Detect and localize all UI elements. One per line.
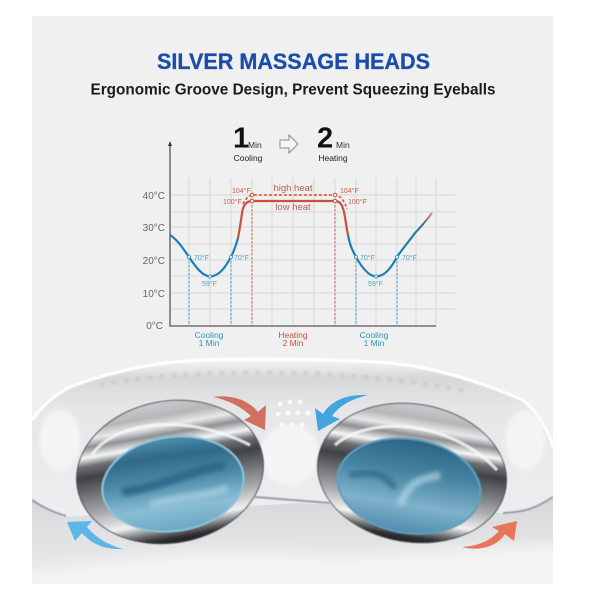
red temperature labels: 104°F: [232, 187, 251, 195]
right massage head: [316, 402, 508, 544]
phase labels: [195, 330, 389, 348]
right blue lens: [336, 436, 482, 536]
step: 1 min cooling: Min: [248, 140, 262, 150]
phase labels: Cooling: [360, 330, 389, 340]
step: 2 min heating: [317, 122, 350, 163]
high heat dashed line: [243, 195, 347, 209]
blue temperature labels: 59°F: [368, 280, 383, 288]
step: 2 min heating: 2: [317, 122, 333, 154]
step: 2 min heating: Min: [336, 140, 350, 150]
heat labels: high heat: [273, 183, 313, 194]
floor shadow: [32, 498, 553, 564]
icon: arrow: [280, 135, 298, 153]
red temperature labels: 104°F: [340, 187, 359, 195]
y axis labels: 0°C: [146, 321, 163, 332]
heat labels: [273, 183, 313, 213]
heat labels: low heat: [275, 202, 311, 213]
y axis labels: [143, 191, 165, 332]
phase labels: Cooling: [195, 330, 224, 340]
blue temperature labels: 59°F: [202, 280, 217, 288]
phase labels: 1 Min: [364, 338, 385, 348]
blue temperature labels: 70°F: [234, 254, 249, 262]
phase labels: Heating: [278, 330, 308, 340]
step: 1 min cooling: 1: [233, 122, 249, 154]
left massage head: [75, 399, 265, 545]
step: 2 min heating: Heating: [318, 153, 348, 163]
right lens reflections: [350, 473, 440, 505]
red temperature labels: 100°F: [348, 198, 367, 206]
step: 1 min cooling: [233, 122, 263, 163]
shell translucent end highlights: [40, 410, 545, 485]
markers: [187, 193, 399, 278]
left blue lens: [100, 435, 246, 534]
step: 1 min cooling: Cooling: [234, 153, 263, 163]
shell inner ridge: [100, 372, 470, 392]
y axis labels: 30°C: [143, 223, 165, 234]
blue temperature labels: 70°F: [360, 254, 375, 262]
left lens reflections: [122, 465, 228, 505]
cooling curve right: [348, 233, 415, 276]
subtitle: Ergonomic Groove Design, Prevent Squeezing Eyeballs: [90, 82, 496, 98]
transparent shell: [32, 359, 553, 517]
arrow: blue top right: [315, 395, 368, 431]
dashed guide lines: [189, 201, 397, 326]
y axis labels: 20°C: [143, 256, 165, 267]
phase labels: 1 Min: [199, 338, 220, 348]
cycle legend: [233, 122, 350, 163]
perforated vent: [276, 400, 310, 427]
rising tail: [414, 213, 432, 234]
red temperature labels: 100°F: [223, 198, 242, 206]
shell top edge: [32, 359, 553, 447]
cooling curve left: [170, 235, 238, 276]
low heat line: [238, 201, 348, 238]
massager device: [32, 358, 553, 564]
title: SILVER MASSAGE HEADS: [157, 49, 430, 74]
shell lower edge: [32, 497, 553, 516]
y axis labels: 10°C: [143, 289, 165, 300]
arrow: orange bottom right: [462, 521, 517, 549]
y axis labels: 40°C: [143, 191, 165, 202]
grid lines: [170, 178, 456, 326]
blue temperature labels: [194, 254, 417, 288]
red temperature labels: [223, 187, 367, 206]
axes: [170, 144, 436, 326]
arrow: red top left: [213, 396, 266, 430]
phase labels: 2 Min: [283, 338, 304, 348]
blue temperature labels: 70°F: [402, 254, 417, 262]
blue temperature labels: 70°F: [194, 254, 209, 262]
arrow: blue bottom left: [67, 521, 123, 549]
temperature chart: [143, 141, 456, 348]
